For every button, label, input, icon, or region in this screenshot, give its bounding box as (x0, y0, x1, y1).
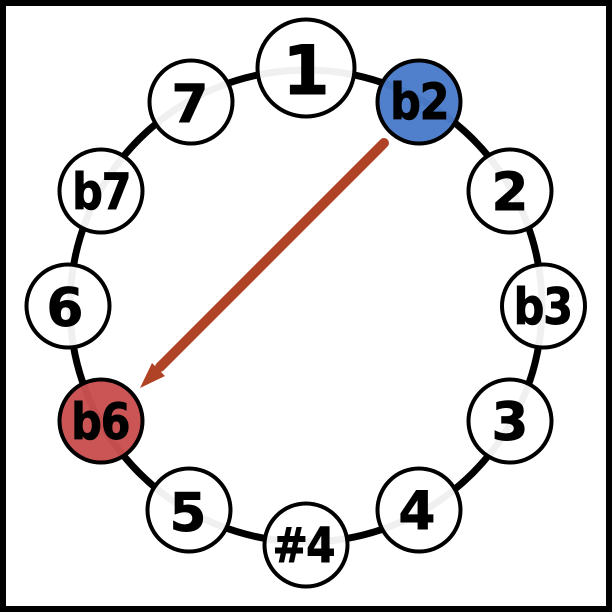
note b6, highlighted red: b6 (71, 393, 129, 451)
note 1: 1 (282, 32, 330, 111)
note 7: 7 (172, 74, 208, 135)
arrow from b2 to b6 (140, 143, 384, 388)
note 5 (148, 468, 230, 552)
note b6, highlighted red (60, 380, 142, 462)
note 3 (468, 380, 552, 462)
note 5: 5 (170, 483, 206, 544)
note #4: #4 (272, 517, 334, 574)
note #4 (264, 504, 348, 586)
note 7 (150, 60, 232, 144)
note b2, highlighted blue (378, 60, 460, 144)
note 6 (26, 264, 110, 348)
note b7: b7 (72, 163, 130, 221)
note b2, highlighted blue: b2 (390, 73, 448, 131)
note 6: 6 (47, 278, 83, 339)
note b3 (502, 264, 585, 348)
note 2: 2 (492, 162, 528, 223)
note b3: b3 (514, 278, 572, 336)
note 4: 4 (399, 481, 435, 542)
note 3: 3 (492, 392, 528, 453)
note 1 (258, 20, 354, 116)
ring (70, 70, 542, 542)
note b7 (60, 150, 142, 232)
note 2 (468, 150, 552, 232)
note 4 (378, 468, 460, 552)
